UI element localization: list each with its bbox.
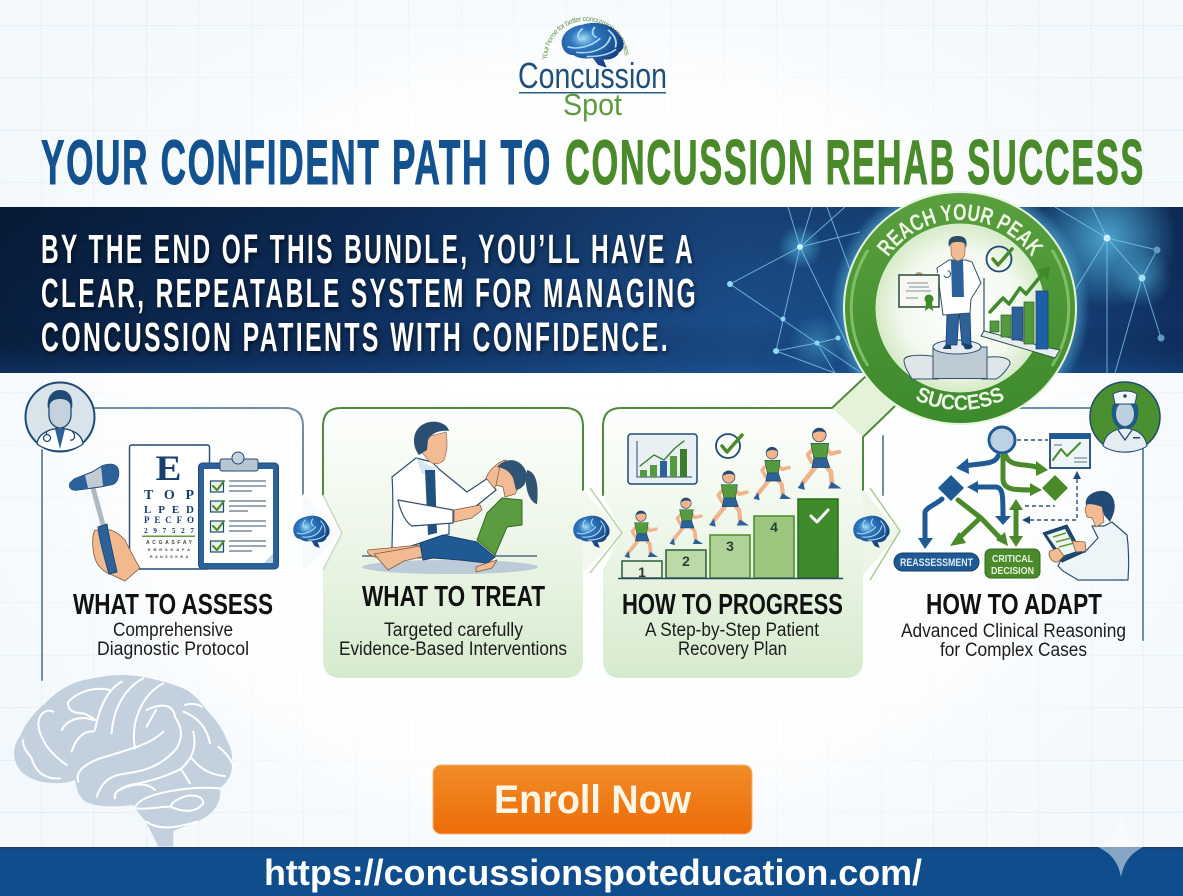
logo: Concussion Spot [518,17,667,122]
banner statement: BY THE END OF THIS BUNDLE, YOU’LL HAVE A [41,226,695,272]
connector: step 1 to 2 chevron and brain [293,494,342,572]
panel 4: how to adapt [883,382,1160,661]
illustration: doctor examining patient [362,422,538,574]
panel 2: what to treat [323,408,583,678]
badge bottom text: SUCCESS [916,388,1004,410]
podium [904,340,1010,379]
panel 1 outline [42,408,303,680]
panel 3 card [603,408,863,678]
icon: eye chart: TOP [144,488,194,503]
footer url: https://concussionspoteducation.com/ [264,852,922,893]
icon: clipboard checklist [198,452,278,569]
panel 2 card [323,408,583,678]
enroll button [433,765,752,834]
certificate [899,275,939,311]
icon: eye chart: EBRSKAFA [148,547,190,552]
description: adapt: for Complex Cases [940,640,1087,661]
footer bar [0,847,1183,896]
heading: what to treat: WHAT TO TREAT [362,581,545,613]
icon: mini chart [628,434,697,484]
logo brain [562,23,624,68]
banner network graphic [727,207,1172,373]
heading: how to progress: HOW TO PROGRESS [622,589,843,621]
patient [368,460,538,572]
banner statement: CLEAR, REPEATABLE SYSTEM FOR MANAGING [41,270,698,316]
logo arc tagline: Your home for better concussion strategies [542,17,628,60]
icon: eye chart: LPED [144,504,194,516]
logo rule [519,92,666,94]
panel 3: how to progress [603,408,863,678]
connector: step 3 to 4 chevron and brain [853,488,900,580]
description: treat [339,620,567,660]
icon: eye chart: RANSGKBA [150,555,188,559]
chart: recovery steps: 2 [682,553,690,569]
icon: eye chart: 297527 [144,526,194,535]
heading: how to adapt: HOW TO ADAPT [926,589,1102,621]
description: progress: Recovery Plan [678,639,787,660]
heading: what to assess: WHAT TO ASSESS [73,589,273,621]
badge: reach your peak success [843,191,1077,425]
description: progress: A Step-by-Step Patient [645,620,820,641]
badge top text: REACH YOUR PEAK [876,204,1044,257]
description: treat: Evidence-Based Interventions [339,639,567,660]
icon: decision flowchart [894,427,1090,578]
chart: recovery steps: 4 [770,519,778,535]
description: assess: Diagnostic Protocol [97,639,249,660]
growth bar chart [981,266,1060,358]
icon: check circle [716,434,742,458]
description: adapt [901,621,1126,661]
icon: eye chart [130,445,210,569]
panel 1: what to assess [26,382,303,680]
title part: blue: YOUR CONFIDENT PATH TO [41,128,552,198]
button label: Enroll Now [494,778,692,822]
icon: eye chart: PECFO [144,515,194,525]
tag: reassessment: REASSESSMENT [900,557,973,569]
panel 2 outline [323,408,583,495]
magnifier handle [832,368,905,437]
panel 3 outline [603,408,863,495]
connector: step 2 to 3 chevron and brain [573,488,622,573]
logo sub-word: Spot [563,87,622,122]
check mark [986,246,1012,272]
icon: doctor avatar [26,382,94,452]
illustration: clinician with tablet [1043,491,1129,580]
tag: critical decision [985,549,1040,578]
icon: nurse avatar [1090,382,1160,452]
certified clinician figure [915,236,981,349]
sparkle watermark [1098,817,1143,877]
icon: eye chart: E [156,448,182,488]
description: adapt: Advanced Clinical Reasoning [901,621,1126,642]
faded brain watermark [14,675,233,847]
description: assess [97,620,249,660]
title [41,128,1145,198]
description: progress [645,620,820,660]
chart: recovery steps: 1 [638,564,646,580]
panel 4 outline [883,408,1143,640]
banner [0,207,1183,373]
logo wordmark: Concussion [518,55,667,96]
description: assess: Comprehensive [113,620,233,641]
icon: eye chart: ACGASFAY [146,540,193,546]
tag: critical decision: DECISION [991,565,1034,577]
runner figures climbing steps [626,428,839,557]
icon: reflex hammer in hand [69,464,140,581]
tag: critical decision: CRITICAL [992,553,1033,565]
description: treat: Targeted carefully [384,620,523,641]
doctor [392,422,506,552]
chart: recovery steps [618,499,843,580]
banner statement [41,226,698,360]
banner statement: CONCUSSION PATIENTS WITH CONFIDENCE. [41,314,670,360]
tag: reassessment [894,553,979,571]
chart: recovery steps: 3 [726,538,734,554]
